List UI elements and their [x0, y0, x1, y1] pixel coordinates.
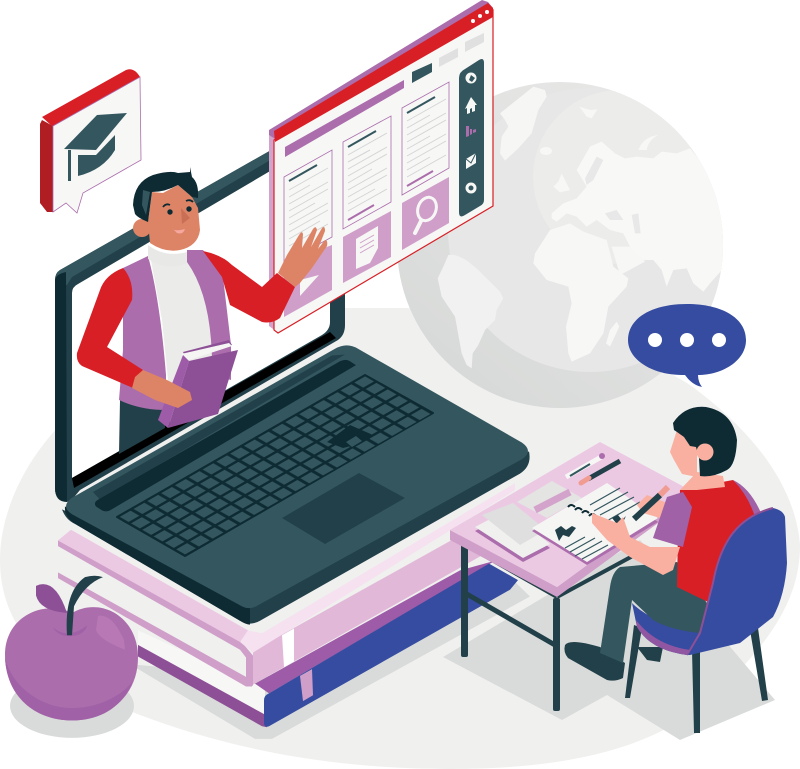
eyes [167, 209, 173, 215]
hinge bar [95, 360, 356, 511]
desk shadow [443, 540, 775, 740]
torso red vest [677, 480, 755, 603]
neck [680, 472, 725, 490]
trackpad [282, 473, 405, 544]
notebook [532, 483, 658, 565]
speech bubble: typing [628, 304, 746, 387]
tile: search [402, 177, 449, 250]
card 3 [402, 82, 449, 195]
far legs [461, 540, 468, 657]
writing pen [634, 487, 668, 519]
browser window [269, 0, 493, 333]
chair back edge [687, 508, 773, 655]
chair back [687, 508, 787, 655]
desk [450, 442, 690, 711]
chair seat [632, 603, 700, 655]
icon: graduation cap [64, 113, 127, 181]
face [148, 185, 200, 251]
icon: gear [467, 184, 475, 192]
island: iceland [540, 147, 552, 155]
background blob [0, 308, 800, 769]
keyboard [117, 375, 433, 556]
card 2 [343, 116, 391, 229]
shadow under books [130, 577, 530, 739]
island: arctic [638, 136, 657, 150]
held book [158, 340, 238, 428]
neck collar [148, 245, 187, 267]
teacher body [77, 167, 238, 454]
island: madagascar [606, 322, 619, 347]
header bars [285, 33, 484, 157]
top book [58, 483, 515, 687]
chair legs [625, 625, 768, 733]
icon: chart [466, 126, 476, 137]
apple stem [67, 576, 103, 635]
laptop base [62, 345, 530, 625]
continent: eurasia [552, 142, 723, 292]
globe [397, 82, 732, 408]
pencil [581, 461, 620, 483]
student [564, 407, 787, 681]
forearm [592, 513, 680, 575]
ear [133, 219, 151, 237]
hair [133, 167, 198, 222]
apple dimple [53, 626, 87, 636]
laptop screen [55, 108, 345, 502]
arabia [612, 247, 645, 275]
icon: home [465, 97, 477, 114]
vest [119, 250, 231, 410]
graduation speech bubble [40, 69, 141, 213]
icon: user [466, 72, 476, 84]
pants [600, 562, 707, 663]
continent: south america [438, 255, 503, 368]
eyebrows [163, 200, 193, 207]
pants [119, 400, 165, 454]
icon: mail [466, 153, 476, 169]
continent: greenland [500, 87, 547, 161]
hair [673, 407, 737, 476]
left hand [132, 370, 192, 408]
sleeve [653, 492, 692, 547]
left arm [77, 268, 143, 388]
books and laptop base group [58, 483, 530, 739]
tile: play [284, 245, 332, 317]
far shoe [637, 647, 663, 662]
other hand [637, 495, 667, 518]
teacher right arm and hand [203, 227, 327, 322]
sidebar [459, 59, 484, 216]
continent: africa [533, 223, 628, 362]
card 1 [284, 150, 332, 263]
island: svalbard [580, 107, 597, 118]
tile: note [343, 211, 391, 283]
nose [181, 208, 190, 224]
apple [5, 576, 138, 738]
near shoe [564, 642, 625, 681]
title bar [274, 3, 493, 142]
island: uk [553, 173, 570, 192]
shirt [150, 255, 214, 400]
mouth [172, 228, 185, 234]
hair streaks [142, 190, 150, 215]
pen [566, 453, 605, 477]
bottom book [138, 561, 518, 727]
chair seat edge [636, 620, 690, 655]
face [670, 430, 697, 477]
screen interior [72, 130, 340, 478]
sea gaps [585, 157, 641, 233]
ear [696, 444, 714, 460]
apple leaf [36, 584, 67, 613]
hinge band [93, 355, 345, 500]
left book [475, 481, 582, 562]
